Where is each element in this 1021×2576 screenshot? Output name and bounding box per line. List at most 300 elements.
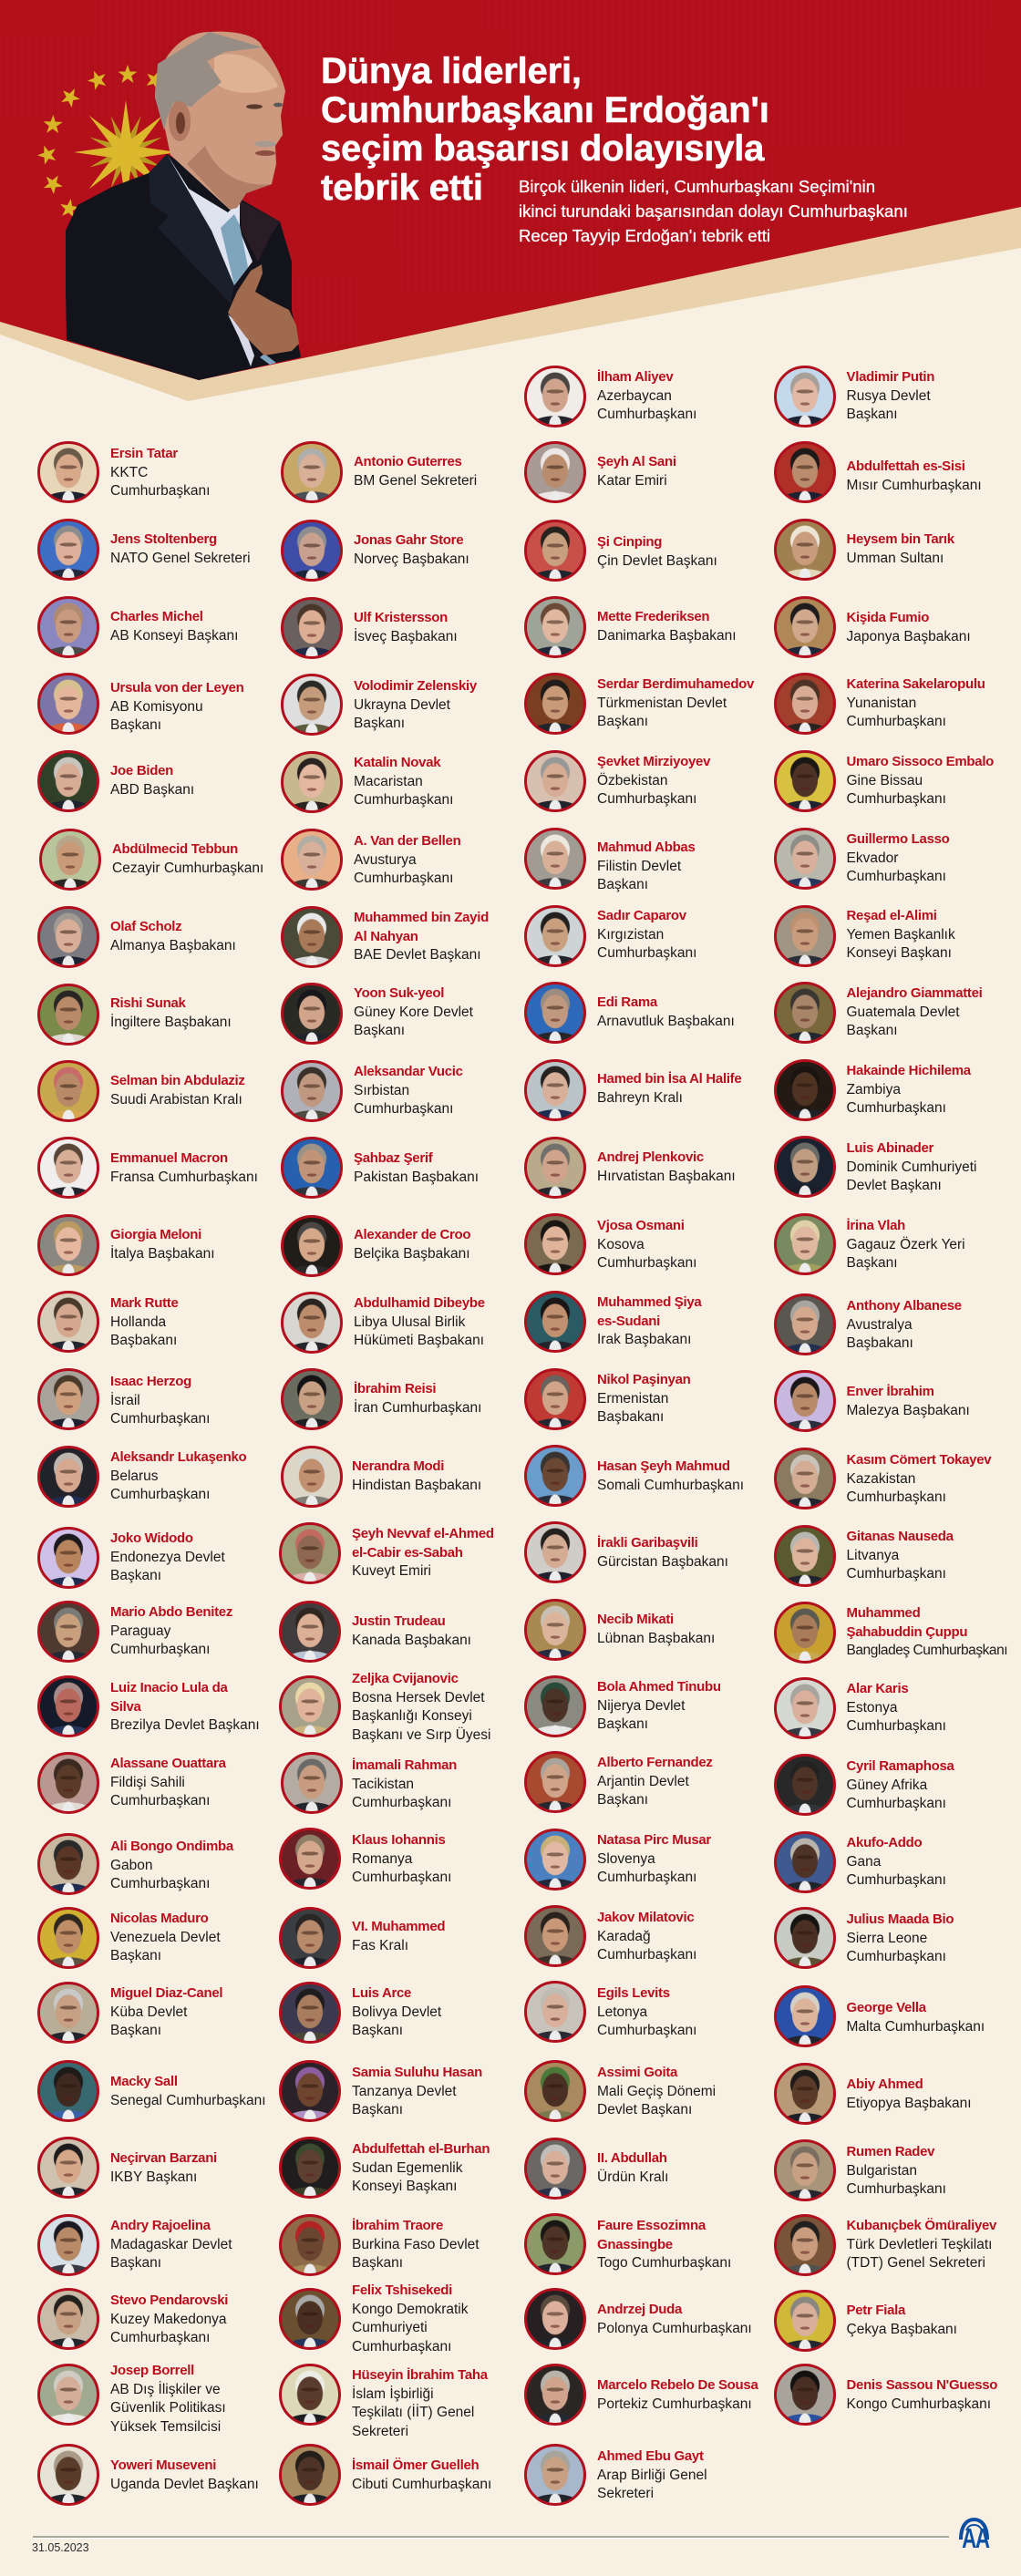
text: Assimi Goita [597, 2065, 677, 2080]
red background [0, 0, 1021, 380]
text: Enver İbrahim [846, 1384, 934, 1399]
footer rule [33, 2536, 949, 2539]
text: Abdulfettah el-Burhan [352, 2141, 490, 2157]
leader: Mario Abdo Benitez [37, 1601, 232, 1663]
leader: Umaro Sissoco Embalo [773, 750, 835, 812]
text: Cumhurbaşkanı [846, 2181, 946, 2197]
text: İmamali Rahman [352, 1757, 457, 1773]
text: Olaf Scholz [110, 919, 181, 934]
leader: Olaf Scholz [37, 906, 236, 968]
text: Cumhurbaşkanı [846, 714, 946, 729]
text: Samia Suluhu Hasan [352, 2065, 482, 2080]
text: Muhammed bin Zayid [354, 910, 489, 925]
text: (TDT) Genel Sekreteri [846, 2255, 985, 2271]
text: Burkina Faso Devlet [352, 2237, 480, 2252]
text: Suudi Arabistan Kralı [110, 1092, 242, 1108]
text: Nikol Paşinyan [597, 1372, 691, 1387]
leader: Şeyh Al Sani [524, 441, 586, 503]
leader: Guillermo Lasso [773, 828, 835, 890]
leader: Hüseyin İbrahim Taha [279, 2364, 341, 2426]
beige diagonal band [0, 207, 1021, 401]
text: Avustralya [846, 1317, 913, 1333]
text: Umman Sultanı [846, 551, 944, 566]
text: Ukrayna Devlet [354, 697, 450, 713]
text: Joko Widodo [110, 1530, 193, 1546]
text: Başbakanı [110, 1333, 177, 1348]
leader: Şeyh Nevvaf el-Ahmed el-Cabir es-Sabah [279, 1522, 341, 1584]
text: Başkanı [352, 2023, 403, 2038]
text: Cumhurbaşkanı [597, 407, 696, 422]
leader: Kasım Cömert Tokayev [773, 1448, 835, 1510]
text: Bahreyn Kralı [597, 1090, 683, 1106]
text: Madagaskar Devlet [110, 2237, 232, 2252]
leader: Aleksandar Vucic [281, 1060, 463, 1122]
text: Serdar Berdimuhamedov [597, 676, 754, 692]
text: Bolivya Devlet [352, 2004, 441, 2020]
portrait: Recep Tayyip Erdoğan [66, 32, 301, 380]
text: Şi Cinping [597, 534, 662, 550]
text: Estonya [846, 1700, 898, 1716]
text: Kişida Fumio [846, 610, 929, 625]
text: Cumhurbaşkanı [846, 1489, 946, 1505]
text: Letonya [597, 2004, 647, 2020]
subtitle: Recep Tayyip Erdoğan'ı tebrik etti [519, 226, 770, 245]
text: Hollanda [110, 1314, 166, 1330]
text: Şeyh Nevvaf el-Ahmed [352, 1526, 494, 1541]
text: Tacikistan [352, 1777, 414, 1792]
text: Hüseyin İbrahim Taha [352, 2367, 488, 2383]
text: Gürcistan Başbakanı [597, 1554, 728, 1570]
leader: Antonio Guterres [281, 441, 477, 503]
text: el-Cabir es-Sabah [352, 1545, 463, 1561]
text: Şahabuddin Çuppu [846, 1624, 967, 1640]
text: Ürdün Kralı [597, 2169, 668, 2185]
leader: Giorgia Meloni [37, 1214, 215, 1276]
text: Bosna Hersek Devlet [352, 1690, 485, 1705]
leader: Ersin Tatar [37, 441, 210, 503]
leader: Yoon Suk-yeol [281, 983, 473, 1045]
text: Alassane Ouattara [110, 1756, 226, 1771]
text: Teşkilatı (İİT) Genel [352, 2405, 474, 2420]
emblem: gold stars [37, 65, 168, 222]
text: Başkanı [354, 1023, 405, 1038]
leader: Katalin Novak [281, 751, 453, 813]
text: Aleksandar Vucic [354, 1064, 463, 1079]
text: Andrzej Duda [597, 2302, 682, 2317]
leader: Joko Widodo [37, 1527, 225, 1589]
leader: Nerandra Modi [281, 1446, 343, 1508]
subtitle: Birçok ülkenin lideri, Cumhurbaşkanı Seçimi'nin [519, 177, 875, 196]
text: Sekreteri [352, 2424, 408, 2439]
text: İsrail [110, 1393, 140, 1408]
text: Gitanas Nauseda [846, 1529, 954, 1544]
text: IKBY Başkanı [110, 2169, 197, 2185]
text: Irak Başbakanı [597, 1332, 691, 1347]
text: Yoon Suk-yeol [354, 985, 444, 1001]
leader: Kubanıçbek Ömüraliyev [773, 2214, 835, 2276]
text: Vjosa Osmani [597, 1218, 685, 1233]
text: Nijerya Devlet [597, 1698, 685, 1714]
text: Karadağ [597, 1929, 651, 1944]
text: Giorgia Meloni [110, 1227, 201, 1242]
text: Başkanı [354, 716, 405, 731]
leader: Kişida Fumio [773, 596, 835, 658]
leader: Ahmed Ebu Gayt [524, 2444, 586, 2506]
leader: Andrzej Duda [524, 2288, 586, 2350]
text: Hamed bin İsa Al Halife [597, 1071, 741, 1087]
leader: Isaac Herzog [37, 1368, 210, 1430]
leader: Andrej Plenkovic [524, 1137, 586, 1199]
text: Cumhurbaşkanı [354, 792, 453, 808]
text: Fransa Cumhurbaşkanı [110, 1170, 258, 1185]
title: tebrik etti [321, 168, 483, 208]
leader: Cyril Ramaphosa [773, 1754, 835, 1816]
text: Alberto Fernandez [597, 1755, 713, 1770]
text: Gine Bissau [846, 773, 923, 788]
text: Jens Stoltenberg [110, 531, 217, 547]
leader: Vjosa Osmani [524, 1213, 586, 1275]
text: İrakli Garibaşvili [597, 1535, 698, 1551]
text: AB Komisyonu [110, 699, 203, 715]
text: Rumen Radev [846, 2144, 934, 2159]
text: Hırvatistan Başbakanı [597, 1169, 736, 1184]
leader: Alejandro Giammattei [773, 982, 835, 1044]
text: Cumhurbaşkanı [597, 2023, 696, 2038]
text: Bulgaristan [846, 2163, 917, 2179]
text: Şevket Mirziyoyev [597, 754, 710, 769]
text: Başbakanı [846, 1335, 913, 1351]
text: İran Cumhurbaşkanı [354, 1400, 481, 1416]
text: Luiz Inacio Lula da [110, 1680, 227, 1695]
header banner [0, 0, 1021, 401]
text: Romanya [352, 1851, 412, 1867]
leader: Macky Sall [37, 2060, 266, 2122]
leader: II. Abdullah [524, 2138, 586, 2200]
text: Cumhurbaşkanı [110, 1642, 210, 1657]
text: Katerina Sakelaropulu [846, 676, 985, 692]
text: Yemen Başkanlık [846, 927, 955, 943]
leader: Ali Bongo Ondimba [37, 1833, 233, 1895]
leader: Josep Borrell [37, 2363, 226, 2435]
text: Kazakistan [846, 1471, 915, 1487]
text: Fildişi Sahili [110, 1775, 185, 1790]
text: Cumhurbaşkanı [846, 869, 946, 884]
text: Başkanı [846, 407, 898, 422]
text: Natasa Pirc Musar [597, 1832, 711, 1848]
leader: Muhammed bin Zayid Al Nahyan [281, 906, 489, 968]
dotted world map texture [0, 0, 994, 346]
text: Mahmud Abbas [597, 840, 696, 855]
text: Başkanı [110, 2255, 161, 2271]
text: Togo Cumhurbaşkanı [597, 2255, 731, 2271]
text: George Vella [846, 2000, 926, 2015]
text: Gana [846, 1854, 881, 1870]
text: Julius Maada Bio [846, 1911, 954, 1927]
text: Başkanı [110, 717, 161, 733]
leader: Andry Rajoelina [37, 2214, 232, 2276]
text: İsveç Başbakanı [354, 629, 458, 644]
text: Başkanı [597, 877, 648, 892]
text: Andry Rajoelina [110, 2218, 211, 2233]
leader: İsmail Ömer Guelleh [279, 2444, 341, 2506]
text: Polonya Cumhurbaşkanı [597, 2321, 752, 2336]
text: Volodimir Zelenskiy [354, 678, 477, 694]
text: Sudan Egemenlik [352, 2160, 463, 2176]
text: BAE Devlet Başkanı [354, 947, 481, 963]
text: Fas Kralı [352, 1938, 408, 1953]
leader: Klaus Iohannis [279, 1828, 341, 1890]
text: Ekvador [846, 850, 898, 866]
text: Cumhurbaşkanı [110, 483, 210, 499]
leader: İbrahim Reisi [281, 1368, 343, 1430]
text: Kuveyt Emiri [352, 1563, 431, 1579]
text: Emmanuel Macron [110, 1150, 228, 1166]
AA logo [957, 2518, 991, 2550]
text: Cumhurbaşkanı [846, 1718, 946, 1734]
text: NATO Genel Sekreteri [110, 551, 251, 566]
text: Malta Cumhurbaşkanı [846, 2019, 985, 2035]
text: Japonya Başbakanı [846, 629, 971, 644]
text: Guillermo Lasso [846, 831, 950, 847]
text: Stevo Pendarovski [110, 2293, 228, 2308]
text: Başkanı [846, 1023, 898, 1038]
title: Cumhurbaşkanı Erdoğan'ı [321, 89, 769, 129]
leader: İbrahim Traore [279, 2214, 341, 2276]
text: Isaac Herzog [110, 1374, 191, 1389]
text: Arnavutluk Başbakanı [597, 1014, 735, 1029]
text: İrina Vlah [846, 1218, 905, 1233]
text: Sırbistan [354, 1083, 409, 1098]
text: Başkanı [352, 2102, 403, 2117]
text: Libya Ulusal Birlik [354, 1314, 465, 1330]
date: 31.05.2023 [32, 2541, 89, 2554]
text: Portekiz Cumhurbaşkanı [597, 2396, 752, 2412]
leader: Şevket Mirziyoyev [524, 750, 586, 812]
text: Abdulfettah es-Sisi [846, 459, 965, 474]
text: Muhammed Şiya [597, 1294, 701, 1310]
leader: Samia Suluhu Hasan [279, 2060, 341, 2122]
text: Kongo Cumhurbaşkanı [846, 2396, 991, 2412]
text: Azerbaycan [597, 388, 672, 404]
text: Devlet Başkanı [597, 2102, 692, 2117]
text: Ermenistan [597, 1391, 668, 1406]
text: Mark Rutte [110, 1295, 179, 1311]
text: Cumhurbaşkanı [597, 945, 696, 961]
text: Belarus [110, 1468, 159, 1484]
leader: Bola Ahmed Tinubu [524, 1675, 586, 1737]
leader: Faure Essozimna Gnassingbe [524, 2213, 586, 2275]
text: Felix Tshisekedi [352, 2282, 452, 2298]
text: Edi Rama [597, 994, 657, 1010]
leader: Neçirvan Barzani [37, 2137, 217, 2199]
text: Antonio Guterres [354, 454, 462, 469]
text: Muhammed [846, 1605, 920, 1621]
leader: Muhammed Şahabuddin Çuppu [773, 1602, 835, 1664]
text: Konseyi Başkanı [352, 2179, 457, 2194]
leader: Justin Trudeau [279, 1601, 341, 1663]
text: Paraguay [110, 1623, 170, 1639]
text: Yoweri Museveni [110, 2458, 216, 2473]
text: Ali Bongo Ondimba [110, 1839, 233, 1854]
text: Guatemala Devlet [846, 1005, 960, 1020]
subtitle: ikinci turundaki başarısından dolayı Cumhurbaşkanı [519, 201, 908, 221]
leader: Egils Levits [524, 1981, 586, 2043]
text: Josep Borrell [110, 2363, 194, 2378]
leader: Hamed bin İsa Al Halife [524, 1059, 586, 1121]
leader: Şi Cinping [524, 520, 586, 582]
text: Kırgızistan [597, 927, 664, 943]
text: Cumhurbaşkanı [597, 791, 696, 807]
text: Abdülmecid Tebbun [112, 841, 238, 857]
leader: Rumen Radev [773, 2139, 835, 2201]
text: Alar Karis [846, 1681, 908, 1696]
text: Zeljka Cvijanovic [352, 1671, 459, 1686]
AA logo: AA [962, 2522, 989, 2554]
text: Cumhurbaşkanı [110, 1876, 210, 1891]
leader: Edi Rama [524, 982, 586, 1044]
text: Cumhurbaşkanı [846, 1100, 946, 1116]
text: Kubanıçbek Ömüraliyev [846, 2218, 996, 2233]
text: Norveç Başbakanı [354, 551, 469, 567]
text: Bangladeş Cumhurbaşkanı [846, 1643, 1007, 1658]
leader: Luis Arce [279, 1982, 341, 2044]
leader: Alar Karis [773, 1677, 835, 1739]
text: Alejandro Giammattei [846, 985, 983, 1001]
leader: Selman bin Abdulaziz [37, 1060, 245, 1122]
text: Necib Mikati [597, 1612, 674, 1627]
text: Macaristan [354, 774, 423, 789]
leader: Alassane Ouattara [37, 1752, 226, 1814]
leader: İrina Vlah [773, 1213, 835, 1275]
text: Joe Biden [110, 763, 173, 778]
text: KKTC [110, 465, 148, 480]
leader: Hasan Şeyh Mahmud [524, 1445, 586, 1507]
text: Başkanı [110, 2023, 161, 2038]
text: İsmail Ömer Guelleh [352, 2458, 479, 2473]
text: Güney Kore Devlet [354, 1005, 473, 1020]
leader: Sadır Caparov [524, 905, 586, 967]
leader: Yoweri Museveni [37, 2444, 259, 2506]
text: Yüksek Temsilcisi [110, 2419, 221, 2435]
text: Cezayir Cumhurbaşkanı [112, 860, 263, 876]
text: Andrej Plenkovic [597, 1149, 704, 1165]
text: Kanada Başbakanı [352, 1633, 471, 1648]
leader: Şahbaz Şerif [281, 1137, 479, 1199]
text: Cumhurbaşkanı [110, 1411, 210, 1427]
text: Sadır Caparov [597, 908, 686, 923]
text: AB Dış İlişkiler ve [110, 2382, 221, 2397]
text: Cumhuriyeti [352, 2320, 428, 2335]
leader: Marcelo Rebelo De Sousa [524, 2364, 586, 2426]
text: Cumhurbaşkanı [110, 2330, 210, 2345]
text: Egils Levits [597, 1985, 670, 2001]
text: Devlet Başkanı [846, 1178, 942, 1193]
text: ABD Başkanı [110, 782, 194, 798]
emblem: gold sun [74, 100, 178, 204]
leader: Abdulhamid Dibeybe [281, 1292, 343, 1354]
text: Cumhurbaşkanı [110, 1793, 210, 1808]
text: Nicolas Maduro [110, 1911, 208, 1926]
leader: Mahmud Abbas [524, 828, 586, 890]
text: İslam İşbirliği [352, 2386, 434, 2402]
text: Silva [110, 1699, 141, 1715]
text: Charles Michel [110, 609, 203, 624]
leader: VI. Muhammed [279, 1907, 341, 1969]
text: Arap Birliği Genel [597, 2468, 707, 2483]
text: Küba Devlet [110, 2004, 187, 2020]
text: Hükümeti Başbakanı [354, 1333, 484, 1348]
leader: A. Van der Bellen [281, 829, 460, 891]
text: İbrahim Reisi [354, 1381, 436, 1396]
text: Miguel Diaz-Canel [110, 1985, 222, 2001]
text: Justin Trudeau [352, 1613, 445, 1629]
title [321, 51, 769, 208]
text: Danimarka Başbakanı [597, 628, 737, 644]
text: Gagauz Özerk Yeri [846, 1237, 965, 1252]
text: Cumhurbaşkanı [597, 1870, 696, 1885]
text: Rishi Sunak [110, 995, 186, 1011]
text: Umaro Sissoco Embalo [846, 754, 994, 769]
text: Heysem bin Tarık [846, 531, 954, 547]
leader: Muhammed Şiya es-Sudani [524, 1291, 586, 1353]
text: İngiltere Başbakanı [110, 1015, 232, 1030]
text: Etiyopya Başbakanı [846, 2096, 972, 2111]
text: Uganda Devlet Başkanı [110, 2477, 259, 2492]
text: Türkmenistan Devlet [597, 696, 727, 711]
text: es-Sudani [597, 1314, 660, 1329]
text: Güvenlik Politikası [110, 2400, 226, 2416]
text: Arjantin Devlet [597, 1774, 689, 1789]
text: Türk Devletleri Teşkilatı [846, 2237, 992, 2252]
text: Katalin Novak [354, 755, 440, 770]
text: Aleksandr Lukaşenko [110, 1449, 246, 1465]
text: Ulf Kristersson [354, 610, 448, 625]
leader: Luiz Inacio Lula da Silva [37, 1675, 260, 1737]
text: A. Van der Bellen [354, 833, 460, 849]
text: Özbekistan [597, 773, 668, 788]
leader: Luis Abinader [773, 1136, 835, 1198]
leader: Jakov Milatovic [524, 1905, 586, 1967]
leader: Nicolas Maduro [37, 1907, 221, 1969]
text: Reşad el-Alimi [846, 908, 937, 923]
text: Almanya Başbakanı [110, 938, 236, 953]
text: Lübnan Başbakanı [597, 1631, 715, 1646]
leader: İlham Aliyev [524, 366, 586, 428]
leader: Natasa Pirc Musar [524, 1829, 586, 1891]
text: Başkanı [846, 1255, 898, 1271]
leader: Mark Rutte [37, 1291, 179, 1353]
text: Güney Afrika [846, 1777, 927, 1793]
text: Sekreteri [597, 2486, 654, 2501]
text: İtalya Başbakanı [110, 1246, 215, 1262]
text: Dominik Cumhuriyeti [846, 1159, 976, 1175]
text: BM Genel Sekreteri [354, 473, 477, 489]
text: Selman bin Abdulaziz [110, 1073, 245, 1088]
leader: Enver İbrahim [773, 1370, 835, 1432]
text: İlham Aliyev [597, 369, 673, 385]
leader: Heysem bin Tarık [773, 519, 835, 581]
text: Tanzanya Devlet [352, 2084, 457, 2099]
text: Cumhurbaşkanı [597, 1255, 696, 1271]
text: Belçika Başbakanı [354, 1246, 470, 1262]
leader: Serdar Berdimuhamedov [524, 673, 586, 735]
text: Nerandra Modi [352, 1458, 444, 1474]
text: Ursula von der Leyen [110, 680, 244, 696]
text: Sierra Leone [846, 1931, 927, 1946]
text: Mısır Cumhurbaşkanı [846, 478, 982, 493]
text: Gabon [110, 1858, 153, 1873]
leader: Mette Frederiksen [524, 596, 586, 658]
